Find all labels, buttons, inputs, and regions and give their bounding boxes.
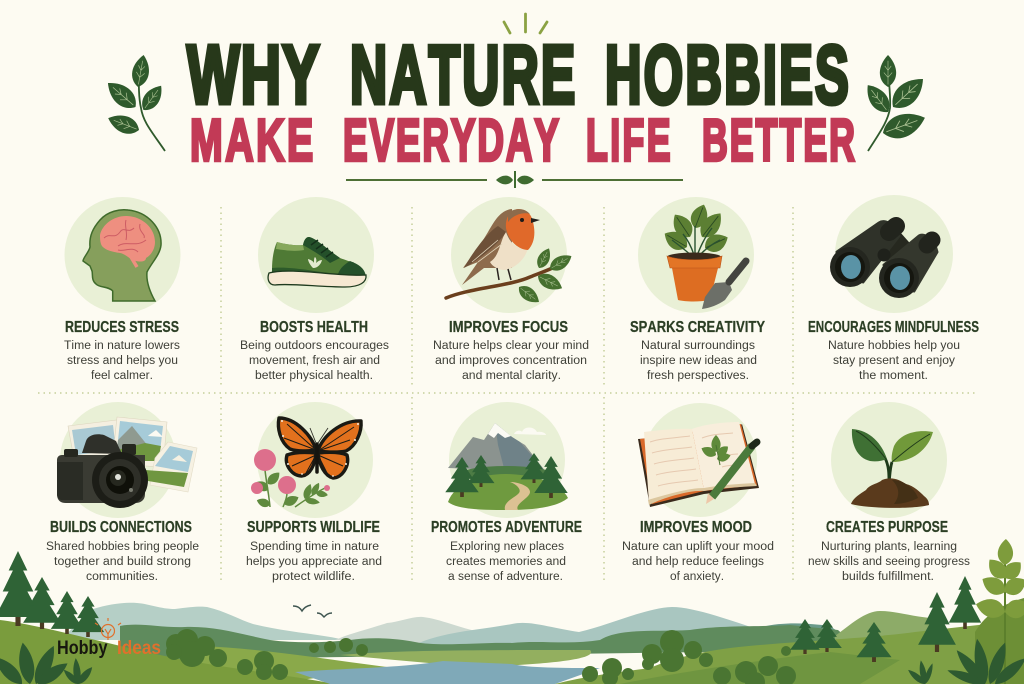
title line two	[190, 106, 857, 174]
title line two: LIFE	[586, 108, 673, 174]
body text: protect wildlife.	[272, 571, 355, 583]
body text: communities.	[86, 571, 158, 583]
fern at right edge	[974, 539, 1024, 684]
panel: promotes adventure	[431, 402, 582, 583]
pine trees	[0, 551, 981, 662]
body text: Nurturing plants, learning	[821, 541, 957, 553]
title line two: MAKE	[190, 106, 316, 173]
river	[295, 661, 600, 684]
icon: potted plant and trowel	[638, 197, 754, 313]
body text: better physical health.	[255, 370, 373, 382]
body text	[64, 340, 180, 382]
body text	[240, 340, 389, 382]
body text: stress and helps you	[67, 355, 178, 367]
icon: head with brain	[64, 197, 180, 313]
icon: sun rays above title	[504, 14, 547, 33]
body text: Nature can uplift your mood	[622, 541, 774, 553]
title divider ornament	[346, 171, 683, 188]
panel: sparks creativity	[630, 197, 765, 382]
body text: and mental clarity.	[462, 370, 561, 382]
title line one: WHY	[187, 28, 321, 121]
panel: boosts health	[240, 197, 389, 382]
body text: Exploring new places	[450, 541, 564, 553]
title line one	[187, 27, 851, 121]
body text: inspire new ideas and	[640, 355, 757, 367]
icon: mountains and trail	[445, 402, 568, 518]
body text	[808, 541, 970, 583]
icon: birds	[293, 605, 332, 617]
body text	[46, 541, 199, 583]
icon: right leaf sprig	[861, 55, 930, 151]
panel: improves mood	[622, 403, 774, 583]
body text: fresh perspectives.	[647, 370, 749, 382]
body text: Time in nature lowers	[64, 340, 180, 352]
heading: BOOSTS HEALTH	[260, 319, 368, 336]
body text: of anxiety.	[670, 571, 724, 583]
body text: Spending time in nature	[250, 541, 379, 553]
panel: builds connections	[46, 402, 199, 583]
body text	[446, 541, 566, 583]
heading: IMPROVES FOCUS	[449, 319, 568, 336]
icon: green sneaker	[258, 197, 374, 313]
panel: supports wildlife	[246, 402, 382, 583]
heading: PROMOTES ADVENTURE	[431, 519, 582, 536]
body text: Nature hobbies help you	[828, 340, 960, 352]
panel: encourages mindfulness	[808, 195, 979, 382]
heading: SPARKS CREATIVITY	[630, 319, 765, 336]
foreground leaves	[0, 638, 1024, 684]
icon: sprout in soil	[831, 402, 947, 518]
panel: improves focus	[433, 197, 589, 382]
panel: creates purpose	[808, 402, 970, 583]
body text: creates memories and	[446, 556, 566, 568]
panel: reduces stress	[64, 197, 180, 382]
body text: and help reduce feelings	[632, 556, 764, 568]
body text: Natural surroundings	[641, 340, 755, 352]
body text: Being outdoors encourages	[240, 340, 389, 352]
body text	[433, 340, 589, 382]
body text: Shared hobbies bring people	[46, 541, 199, 553]
body text: together and build strong	[54, 556, 191, 568]
body text	[622, 541, 774, 583]
icon: left leaf sprig	[102, 54, 167, 151]
body text: a sense of adventure.	[448, 571, 563, 583]
body text: the moment.	[859, 370, 928, 382]
icon: camera and photos	[57, 402, 197, 518]
heading: REDUCES STRESS	[65, 319, 179, 336]
body text: and improves concentration	[435, 355, 587, 367]
icon: binoculars	[830, 195, 953, 313]
body text: Nature helps clear your mind	[433, 340, 589, 352]
logo	[57, 618, 161, 659]
title line one: NATURE	[350, 27, 577, 121]
icon: open journal and pencil	[638, 403, 759, 517]
bushes	[166, 629, 796, 684]
header	[102, 14, 930, 188]
body text	[828, 340, 960, 382]
body text: stay present and enjoy	[833, 355, 955, 367]
body text: new skills and seeing progress	[808, 556, 970, 568]
body text: helps you appreciate and	[246, 556, 382, 568]
title line two: EVERYDAY	[343, 108, 561, 174]
heading: BUILDS CONNECTIONS	[50, 519, 192, 536]
body text	[246, 541, 382, 583]
landscape illustration	[0, 539, 1024, 684]
grid dividers	[38, 207, 978, 581]
body text	[640, 340, 757, 382]
body text: feel calmer.	[91, 370, 153, 382]
title line one: HOBBIES	[605, 28, 851, 121]
title line two: BETTER	[702, 108, 857, 174]
heading: CREATES PURPOSE	[826, 519, 948, 536]
heading: IMPROVES MOOD	[640, 519, 752, 536]
logo wordmark: Hobby	[57, 638, 112, 659]
icon: light bulb	[95, 618, 121, 640]
logo wordmark: Ideas	[117, 638, 161, 659]
heading: SUPPORTS WILDLIFE	[247, 519, 380, 536]
icon: monarch butterfly and flowers	[251, 402, 373, 518]
icon: robin on a branch	[446, 197, 575, 313]
body text: movement, fresh air and	[249, 355, 380, 367]
body text: builds fulfillment.	[842, 571, 934, 583]
